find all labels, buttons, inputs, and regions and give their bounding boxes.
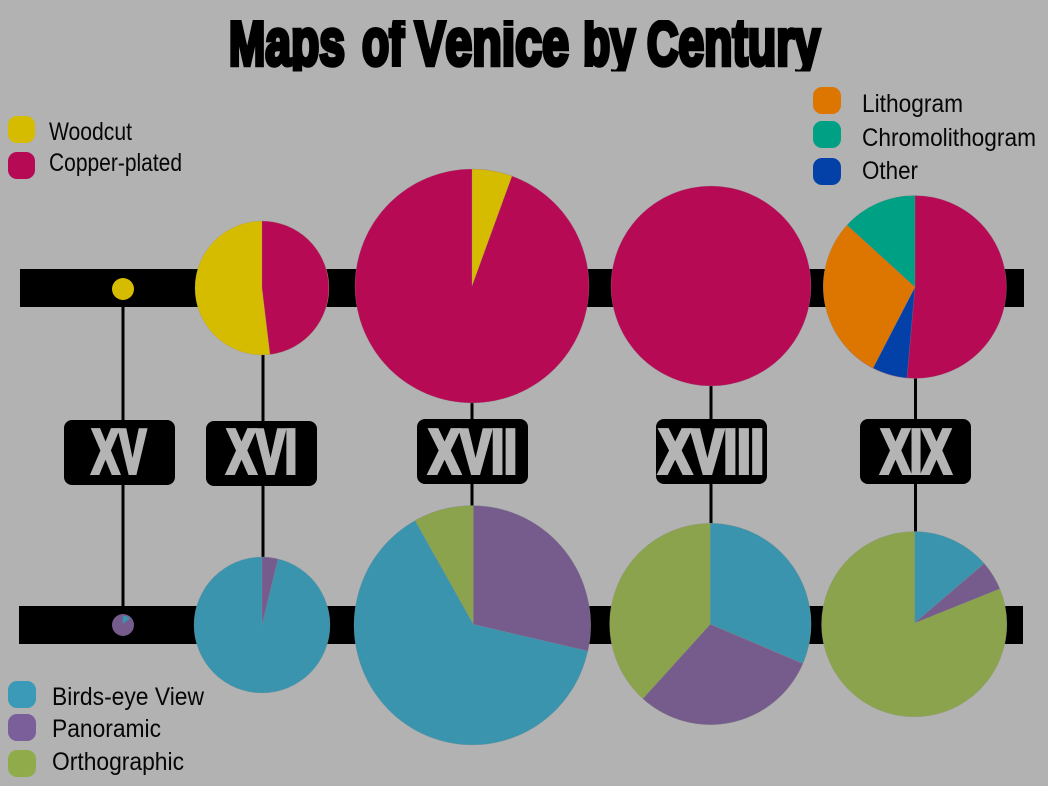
legend: lithogram, chromolithogram and other: Lithogram	[862, 90, 963, 118]
legend: view types: Birds-eye View	[52, 683, 205, 711]
pie: technique XVI	[195, 221, 329, 355]
title	[230, 20, 822, 72]
pie: technique XVII	[355, 169, 589, 403]
title: Maps	[229, 5, 345, 79]
legend: view types: Panoramic	[52, 715, 161, 743]
legend: view types	[8, 681, 205, 777]
timeline bar: map view	[19, 606, 1023, 644]
title: Venice	[415, 5, 569, 79]
pie: view XV	[112, 614, 134, 636]
pie: view XIX	[822, 532, 1007, 717]
pie: technique XIX	[823, 195, 1006, 378]
pie: technique XV	[112, 278, 134, 300]
title: of	[362, 5, 405, 79]
pie: view XVI	[194, 557, 330, 693]
legend: lithogram, chromolithogram and other: Chromolithogram	[862, 124, 1036, 152]
century label XV: XV	[92, 418, 146, 487]
legend: woodcut and copper-plated: Copper-plated	[49, 149, 182, 177]
legend: woodcut and copper-plated: Woodcut	[49, 118, 132, 146]
legend: lithogram, chromolithogram and other	[813, 87, 1036, 185]
connector lines	[123, 298, 916, 616]
century label XVI: XVI	[227, 418, 297, 487]
legend: view types: Orthographic	[52, 748, 184, 776]
legend: lithogram, chromolithogram and other: Other	[862, 157, 918, 185]
pie: view XVII	[354, 506, 591, 745]
century label XVIII: XVIII	[659, 418, 764, 487]
pie: technique XVIII	[611, 186, 811, 386]
title: by	[583, 5, 635, 79]
pie: view XVIII	[610, 523, 811, 725]
legend: woodcut and copper-plated	[8, 116, 182, 179]
century label XIX: XIX	[881, 418, 951, 487]
timeline bar: print technique	[20, 269, 1024, 307]
title: Century	[647, 5, 820, 79]
century label XVII: XVII	[429, 418, 517, 487]
